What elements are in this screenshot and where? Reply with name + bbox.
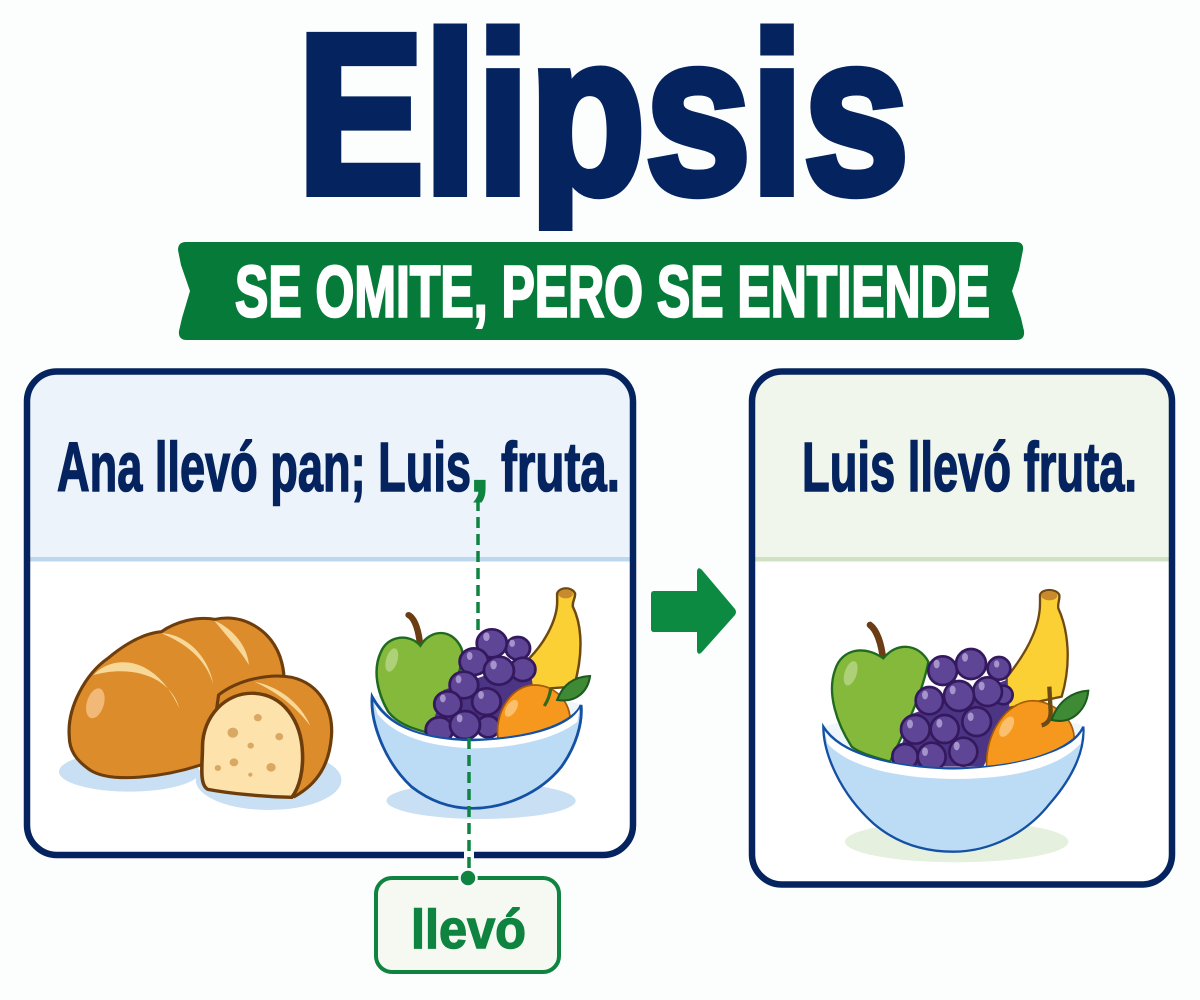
sentence: elided: fruta. [501, 428, 620, 506]
icon: fruit bowl [372, 588, 590, 819]
subtitle ribbon [178, 242, 1024, 340]
icon: bread [59, 618, 341, 810]
label box: omitted verb: llevó [411, 898, 526, 960]
icon: fruit bowl large [823, 590, 1088, 862]
dashed connector: lower [464, 738, 474, 872]
connector dot [460, 870, 476, 886]
dashed connector: upper [476, 500, 480, 632]
sentence: elided: Ana llevó pan; Luis [57, 428, 471, 506]
label box: omitted verb [376, 870, 559, 972]
arrow [651, 568, 736, 654]
comma highlight: , [470, 428, 489, 506]
panel: complete sentence [752, 372, 1172, 884]
panel: sentence with ellipsis [27, 372, 633, 855]
